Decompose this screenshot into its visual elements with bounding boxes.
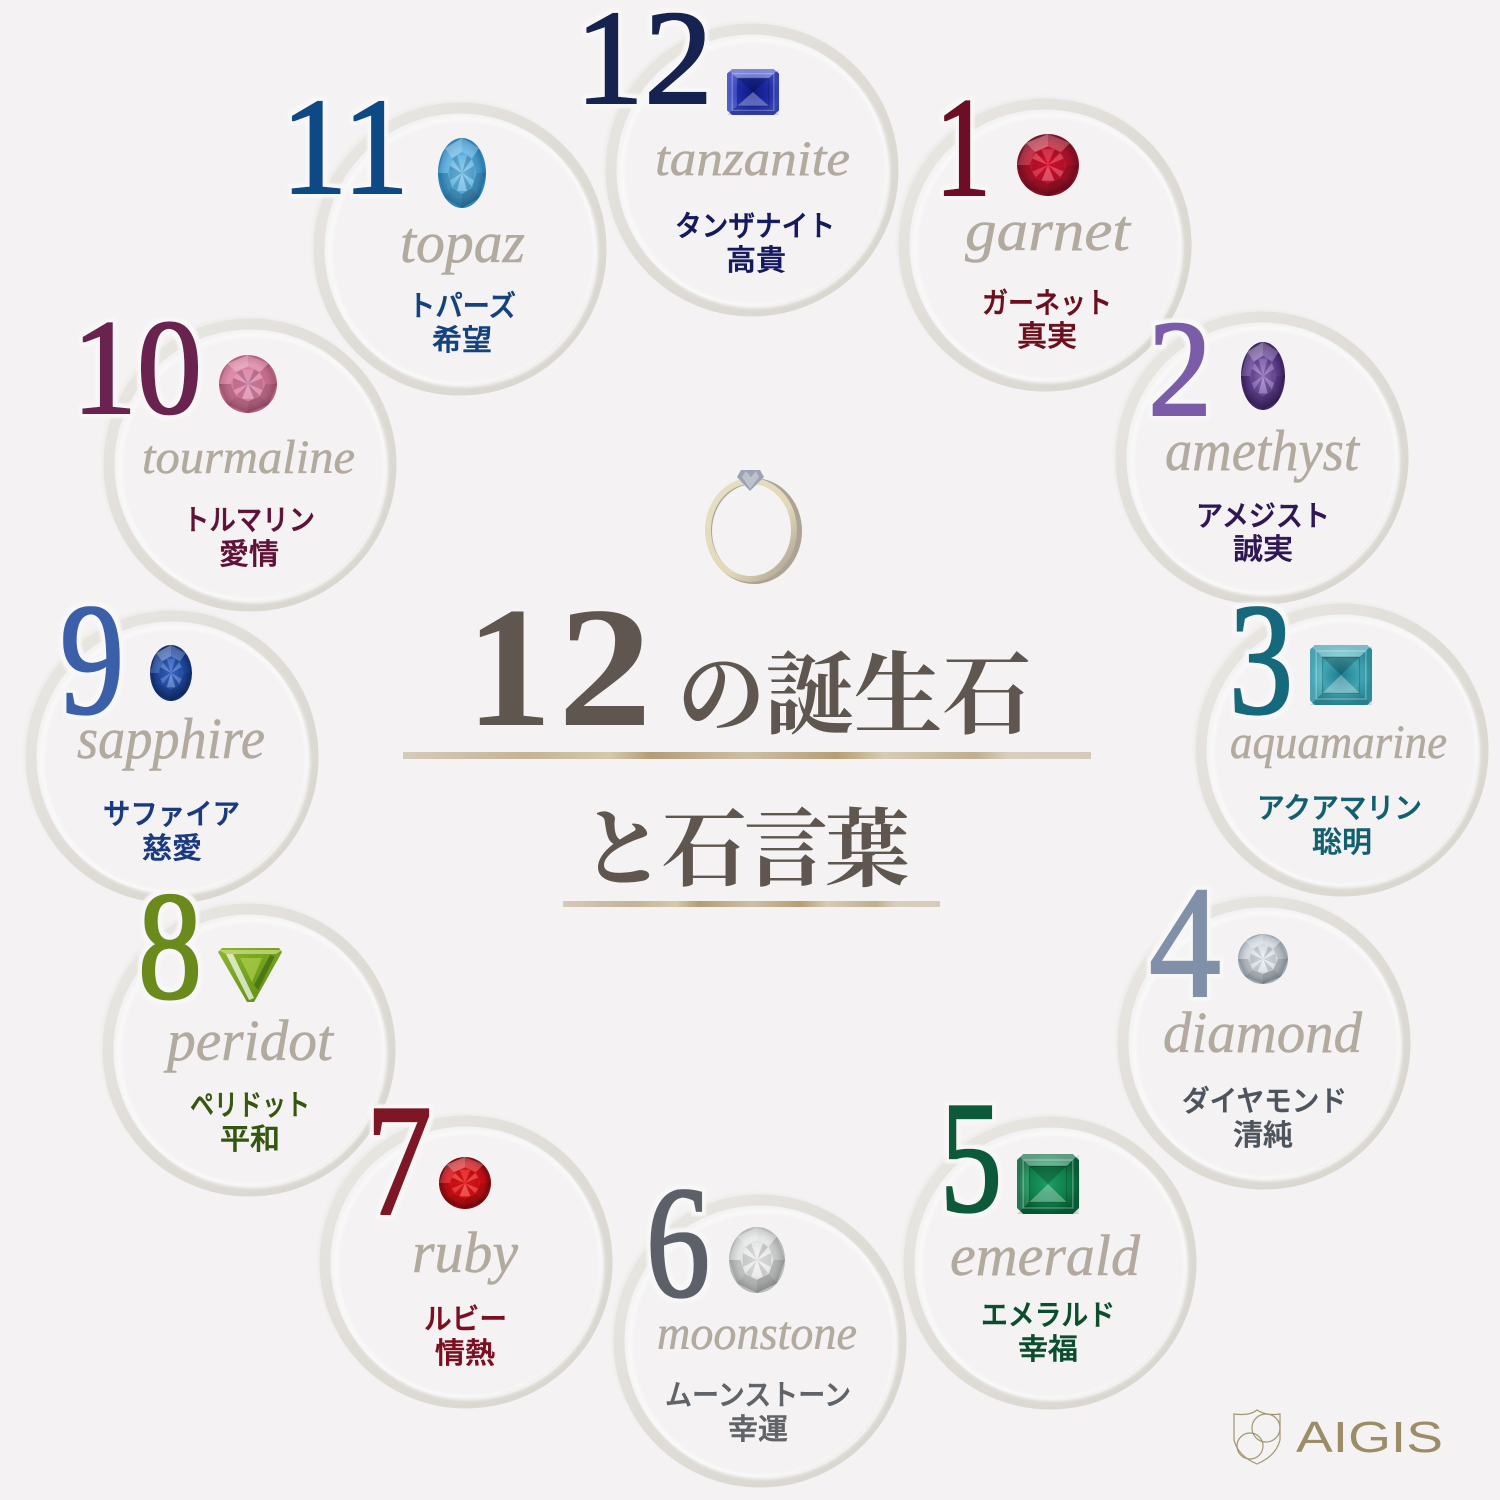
- name: sapphire: sapphire: [77, 706, 265, 771]
- name: moonstone: moonstone: [657, 1307, 857, 1360]
- icon: ring: [708, 470, 799, 581]
- number 7: 7: [366, 1071, 432, 1249]
- number 9: 9: [60, 570, 124, 748]
- gem: emerald: [1017, 1154, 1079, 1214]
- number 3: 3: [1229, 570, 1293, 748]
- label: エメラルド 幸福: [981, 1300, 1115, 1366]
- gem: diamond: [1238, 934, 1288, 984]
- title rule 2: [563, 901, 940, 907]
- label: タンザナイト 高貴: 高貴: [726, 244, 786, 277]
- label: アクアマリン 聡明: アクアマリン: [1257, 793, 1422, 825]
- stone 7 ruby: [366, 1071, 518, 1370]
- number 2: 2: [1148, 292, 1212, 445]
- name: peridot: peridot: [163, 1008, 335, 1073]
- label: アメジスト 誠実: 誠実: [1233, 533, 1293, 566]
- gem: ruby: [439, 1157, 491, 1209]
- gem: sapphire: [150, 645, 192, 701]
- label: エメラルド 幸福: エメラルド: [981, 1300, 1115, 1332]
- label: トパーズ 希望: 希望: [432, 324, 492, 357]
- label: タンザナイト 高貴: タンザナイト: [675, 211, 835, 243]
- label: ルビー 情熱: [424, 1303, 507, 1370]
- stone 8 peridot: [138, 860, 335, 1156]
- title rule 1: [403, 752, 1091, 759]
- name: ruby: ruby: [412, 1220, 518, 1285]
- title: と石言葉: と石言葉: [580, 804, 910, 898]
- name: garnet: garnet: [965, 198, 1132, 263]
- title: 12の誕生石: 1: [466, 573, 552, 763]
- number 6: 6: [646, 1153, 710, 1331]
- name: tanzanite: tanzanite: [655, 130, 850, 186]
- stone 11 topaz: [281, 70, 525, 357]
- name: tourmaline: tourmaline: [142, 431, 355, 484]
- number 4: 4: [1149, 853, 1221, 1031]
- label: トルマリン 愛情: [183, 505, 315, 571]
- label: ダイヤモンド 清純: 清純: [1233, 1119, 1293, 1152]
- gem: peridot: [218, 948, 282, 1002]
- gem: moonstone: [729, 1227, 785, 1293]
- gem: tanzanite: [727, 69, 779, 115]
- stone 2 amethyst: [1148, 292, 1361, 566]
- gem: amethyst: [1241, 342, 1285, 410]
- label: ガーネット 真実: 真実: [1017, 320, 1077, 353]
- label: ムーンストーン 幸運: [665, 1380, 851, 1446]
- stone 3 aquamarine: [1229, 570, 1447, 859]
- label: トパーズ 希望: トパーズ: [408, 290, 516, 323]
- gem: topaz: [438, 138, 486, 208]
- number 11: 11: [281, 70, 409, 223]
- number 10: 10: [72, 293, 202, 443]
- label: ルビー 情熱: ルビー: [424, 1303, 507, 1336]
- label: ムーンストーン 幸運: ムーンストーン: [665, 1380, 851, 1412]
- label: サファイア 慈愛: サファイア: [103, 799, 240, 831]
- wordmark: AIGIS: [1296, 1413, 1443, 1462]
- label: サファイア 慈愛: [103, 799, 240, 865]
- label: ダイヤモンド 清純: [1182, 1085, 1347, 1152]
- stone 5 emerald: [940, 1068, 1141, 1366]
- label: エメラルド 幸福: 幸福: [1018, 1333, 1078, 1366]
- title: 12の誕生石: 2: [558, 573, 652, 763]
- label: アメジスト 誠実: [1196, 501, 1330, 566]
- stone 4 diamond: [1149, 853, 1363, 1152]
- stone 9 sapphire: [60, 570, 265, 865]
- label: トルマリン 愛情: トルマリン: [183, 505, 315, 537]
- label: ムーンストーン 幸運: 幸運: [728, 1413, 788, 1446]
- stone 12 tanzanite: [575, 0, 850, 277]
- name: emerald: emerald: [950, 1223, 1141, 1288]
- name: aquamarine: aquamarine: [1230, 716, 1447, 769]
- label: サファイア 慈愛: 慈愛: [142, 832, 202, 865]
- label: ダイヤモンド 清純: ダイヤモンド: [1182, 1085, 1347, 1118]
- label: アクアマリン 聡明: 聡明: [1312, 826, 1372, 859]
- name: diamond: diamond: [1163, 1000, 1363, 1065]
- gem: tourmaline: [219, 355, 277, 413]
- label: トパーズ 希望: [408, 290, 516, 357]
- label: タンザナイト 高貴: [675, 211, 835, 277]
- label: ペリドット 平和: [190, 1090, 310, 1156]
- gem: aquamarine: [1310, 645, 1372, 705]
- stone 10 tourmaline: [72, 293, 355, 571]
- label: アメジスト 誠実: アメジスト: [1196, 501, 1330, 533]
- icon: shield: [1234, 1410, 1280, 1464]
- label: ペリドット 平和: 平和: [220, 1123, 280, 1156]
- label: ルビー 情熱: 情熱: [435, 1337, 495, 1370]
- title: 12の誕生石: の誕生石: [677, 647, 1031, 746]
- title: 12の誕生石: [466, 573, 1031, 763]
- number 8: 8: [138, 860, 202, 1032]
- stone 6 moonstone: [646, 1153, 857, 1446]
- number 5: 5: [940, 1068, 1002, 1246]
- label: アクアマリン 聡明: [1257, 793, 1422, 859]
- stone 1 garnet: [935, 68, 1132, 353]
- label: ガーネット 真実: [982, 287, 1112, 353]
- label: ペリドット 平和: ペリドット: [190, 1090, 310, 1122]
- name: topaz: topaz: [400, 210, 525, 275]
- gem: garnet: [1017, 134, 1079, 196]
- number 1: 1: [935, 68, 991, 226]
- name: amethyst: amethyst: [1165, 418, 1361, 483]
- label: トルマリン 愛情: 愛情: [219, 538, 279, 571]
- label: ガーネット 真実: ガーネット: [982, 287, 1112, 320]
- logo: AIGIS: [1234, 1410, 1443, 1464]
